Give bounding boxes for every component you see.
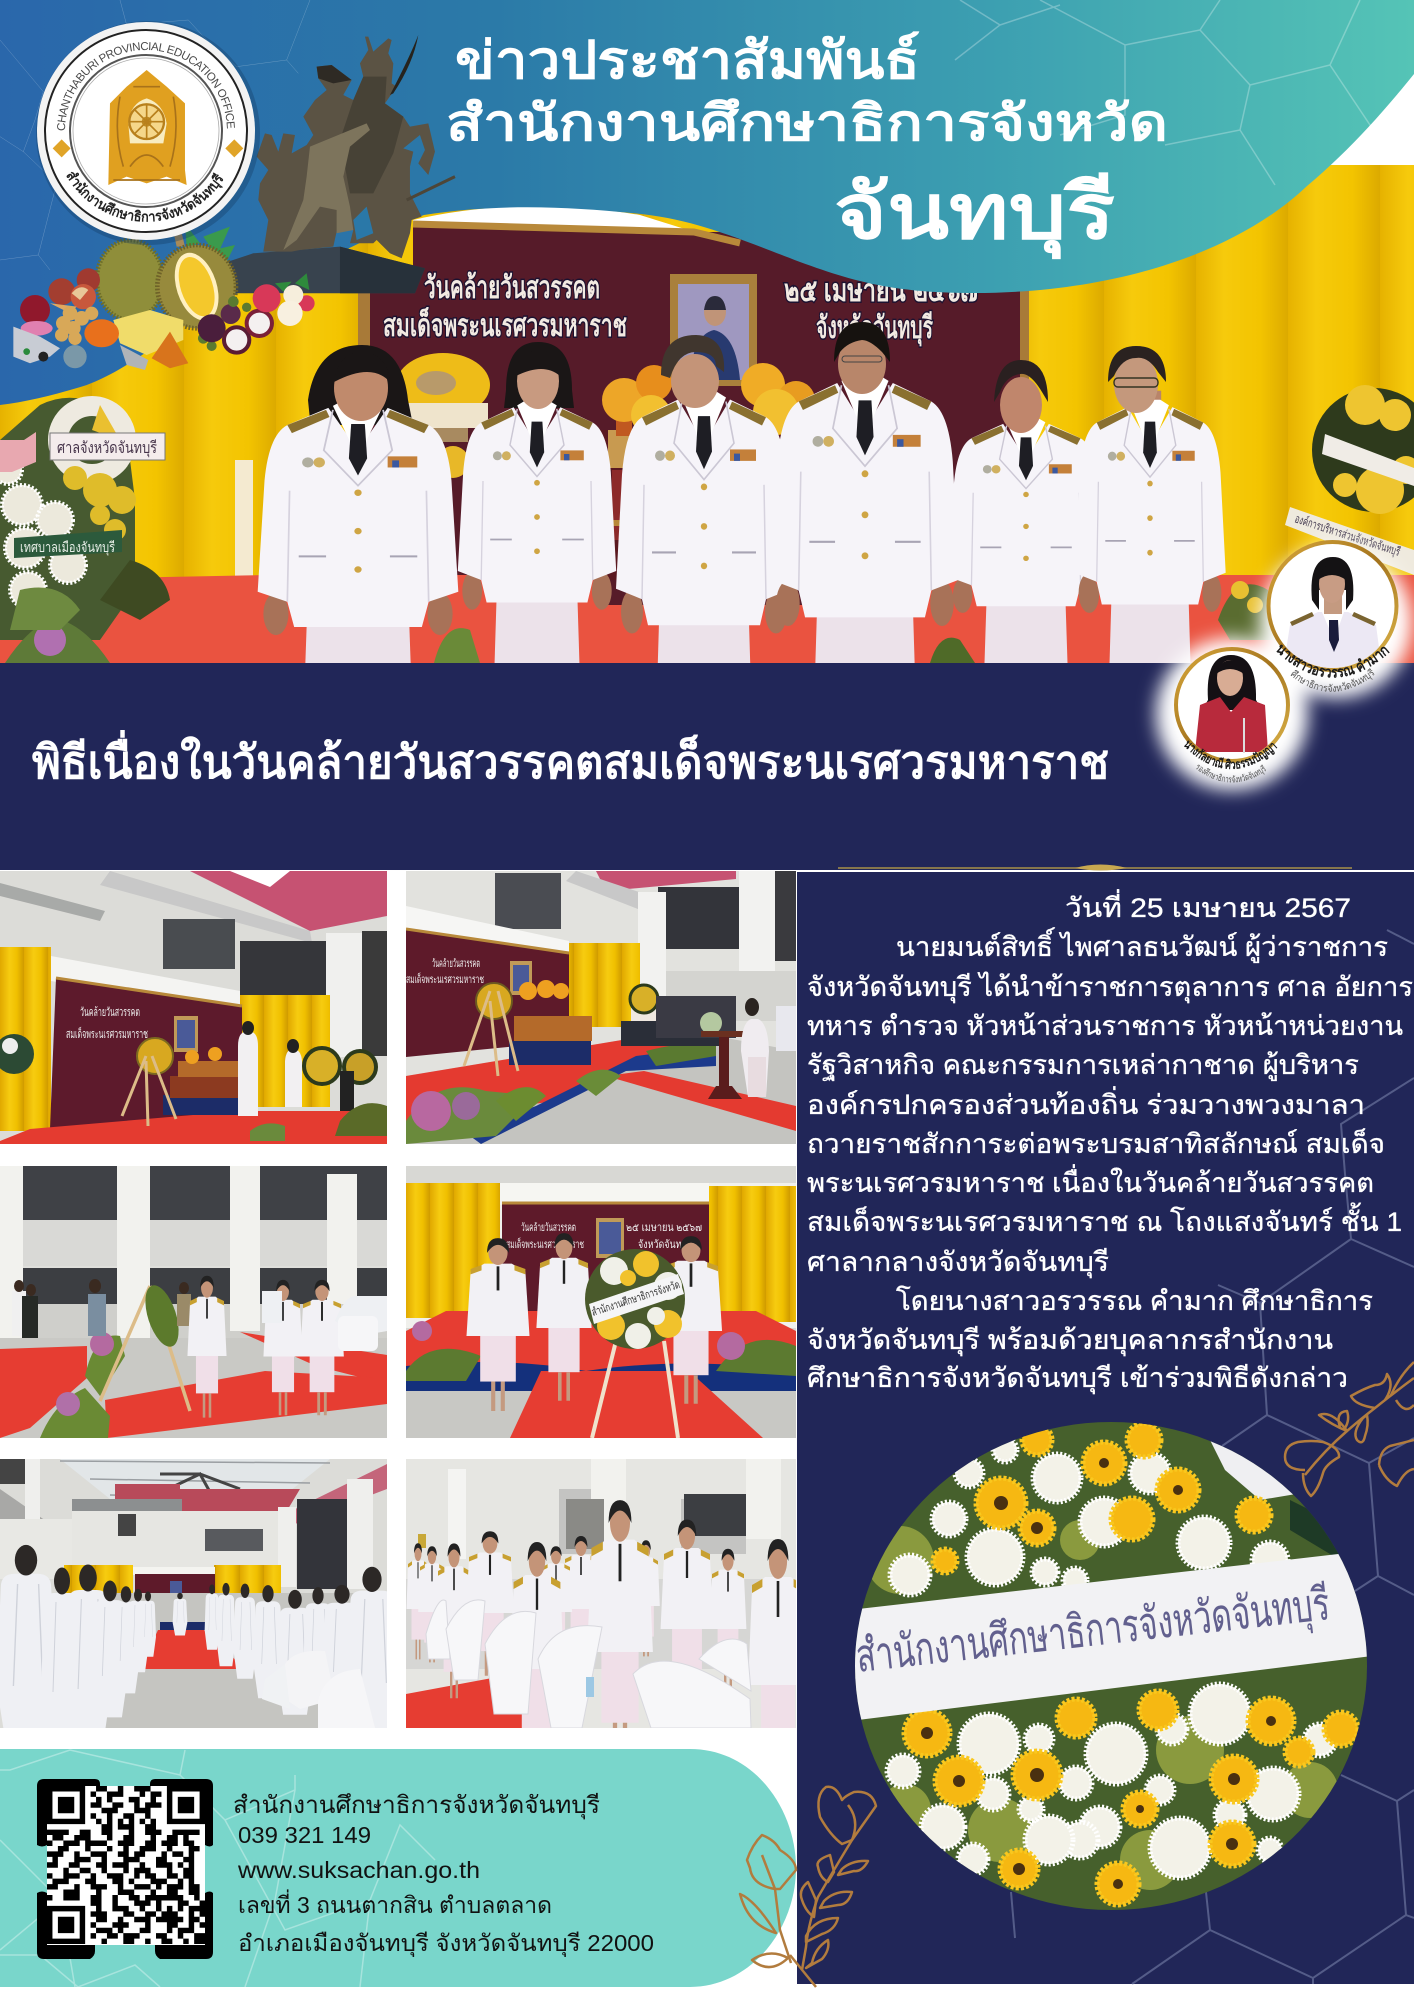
- article body text: ทหาร ตำรวจ หัวหน้าส่วนราชการ หัวหน้าหน่วยงาน: [807, 1011, 1403, 1041]
- contact details: [233, 1792, 654, 1957]
- photo: wreath stand in front of stage, wide view: วันคล้ายวันสวรรคต: [80, 1005, 140, 1019]
- portrait medallion: deputy provincial education officer: รองศึกษาธิการจังหวัดจันทบุรี: [1196, 764, 1266, 782]
- photo: three officers holding office wreath: วันคล้ายวันสวรรคต: [521, 1222, 576, 1234]
- photo: three officers holding office wreath: จังหวัดจันทบุรี: [638, 1238, 692, 1251]
- decorative hexagon lines in contact panel: [0, 1750, 435, 1987]
- provincial education office logo: สำนักงานศึกษาธิการจังหวัดจันทบุรี: [66, 172, 224, 222]
- title heading: public relations news: [446, 31, 1168, 260]
- contact details: อำเภอเมืองจันทบุรี จังหวัดจันทบุรี 22000: [238, 1930, 654, 1957]
- office wreath photo in circle: [850, 1415, 1375, 1915]
- fruit and gemstone cluster: [13, 215, 315, 370]
- title heading: public relations news: สำนักงานศึกษาธิการจังหวัด: [446, 95, 1168, 151]
- photo: three officers holding office wreath: ๒๕ เมษายน ๒๕๖๗: [626, 1222, 702, 1234]
- statue monument on pedestal: [223, 35, 455, 293]
- maroon backdrop with gold frame: [358, 206, 1029, 620]
- article body text: โดยนางสาวอรวรรณ คำมาก ศึกษาธิการ: [896, 1286, 1373, 1316]
- portrait medallion: provincial education officer: [1266, 540, 1398, 692]
- article body text: วันที่ 25 เมษายน 2567: [1065, 889, 1351, 923]
- QR code: [37, 1779, 213, 1959]
- officer 6: [1074, 346, 1226, 691]
- officer 4: [771, 322, 959, 720]
- logo emblem: [53, 70, 243, 185]
- portrait medallion: provincial education officer: นางสาวอรวรรณ คำมาก: [1276, 644, 1390, 678]
- contact details: 039 321 149: [238, 1822, 371, 1848]
- officer 3: [616, 335, 792, 724]
- teal contact panel: [0, 1749, 796, 1987]
- portrait medallion: deputy provincial education officer: [1174, 647, 1290, 782]
- left floral wreaths with signs: ศาลจังหวัดจันทบุรี: [57, 439, 157, 458]
- portrait medallion: provincial education officer: ศึกษาธิการจังหวัดจันทบุรี: [1290, 668, 1374, 692]
- backdrop heading text: ๒๕ เมษายน ๒๕๖๗: [784, 273, 978, 308]
- decorative hexagon lines in header: [0, 0, 1380, 270]
- backdrop heading text: สมเด็จพระนเรศวรมหาราช: [383, 306, 627, 343]
- header wave with blue to teal gradient: [0, 0, 1414, 405]
- backdrop heading text: [383, 270, 978, 347]
- photo: three officers holding office wreath: [406, 1166, 796, 1438]
- photo: governor reading at the lectern: วันคล้ายวันสวรรคต: [432, 958, 480, 970]
- provincial education office logo: [36, 21, 260, 245]
- article body text: ศึกษาธิการจังหวัดจันทบุรี เข้าร่วมพิธีดังกล่าว: [807, 1363, 1348, 1395]
- officer 5: [949, 360, 1103, 686]
- photo: governor reading at the lectern: [406, 871, 796, 1144]
- title heading: public relations news: ข่าวประชาสัมพันธ์: [455, 31, 920, 90]
- yellow pleated curtains: [0, 165, 1414, 663]
- article body text: จังหวัดจันทบุรี พร้อมด้วยบุคลากรสำนักงาน: [807, 1325, 1333, 1357]
- left floral wreaths with signs: เทศบาลเมืองจันทบุรี: [20, 539, 115, 556]
- banner glow behind portraits: [1156, 546, 1412, 790]
- officer 1: [258, 345, 458, 723]
- article body text: [807, 889, 1413, 1395]
- white corner at top right: [1280, 0, 1414, 165]
- gold leaf branch, lower left: [740, 1787, 876, 1987]
- photo: audience standing in white uniforms: [406, 1459, 796, 1728]
- left floral wreaths with signs: [0, 398, 170, 663]
- title heading: public relations news: จันทบุรี: [834, 170, 1115, 260]
- article body text: ศาลากลางจังหวัดจันทบุรี: [807, 1247, 1109, 1279]
- backdrop heading text: จังหวัดจันทบุรี: [816, 310, 933, 347]
- navy article panel: [797, 872, 1414, 1984]
- contact details: www.suksachan.go.th: [237, 1857, 480, 1883]
- article body text: รัฐวิสาหกิจ คณะกรรมการเหล่ากาชาด ผู้บริหาร: [807, 1050, 1359, 1081]
- right floral wreaths with signs: [434, 385, 1414, 663]
- officer 2: [458, 342, 616, 688]
- article body text: องค์กรปกครองส่วนท้องถิ่น ร่วมวางพวงมาลา: [807, 1086, 1365, 1120]
- photo: officer laying wreath: [0, 1166, 387, 1438]
- yellow wreath behind officers: [396, 353, 490, 478]
- article body text: ถวายราชสักการะต่อพระบรมสาทิสลักษณ์ สมเด็จ: [807, 1126, 1385, 1159]
- royal portrait: [670, 274, 757, 386]
- gold ornamental divider: [838, 864, 1352, 870]
- decorative hexagon lines in panel: [1011, 930, 1414, 1984]
- banner heading: พิธีเนื่องในวันคล้ายวันสวรรคตสมเด็จพระนเรศวรมหาราช: [32, 730, 1109, 788]
- photo: three officers holding office wreath: สำนักงานศึกษาธิการจังหวัด: [590, 1279, 681, 1319]
- article body text: นายมนต์สิทธิ์ ไพศาลธนวัฒน์ ผู้ว่าราชการ: [896, 927, 1388, 963]
- backdrop heading text: วันคล้ายวันสวรรคต: [424, 270, 600, 305]
- photo: wreath stand in front of stage, wide view: สมเด็จพระนเรศวรมหาราช: [66, 1026, 148, 1041]
- navy title banner: [0, 663, 1414, 870]
- gold leaf branch, upper right: [1285, 1362, 1414, 1496]
- altar table and flowers: [600, 363, 830, 580]
- portrait medallion: deputy provincial education officer: นางกัลยาณี ศิวธรรมปัญญา: [1184, 740, 1278, 770]
- hero photo: group portrait at the ceremony stage: [0, 165, 1414, 724]
- photo: wreath stand in front of stage, wide view: [0, 871, 387, 1144]
- photo: governor reading at the lectern: สมเด็จพระนเรศวรมหาราช: [406, 972, 484, 986]
- photo: three officers holding office wreath: สมเด็จพระนเรศวรมหาราช: [506, 1237, 584, 1251]
- contact details: เลขที่ 3 ถนนตากสิน ตำบลตลาด: [238, 1889, 552, 1918]
- article body text: จังหวัดจันทบุรี ได้นำข้าราชการตุลาการ ศาล อัยการ: [807, 972, 1413, 1004]
- provincial education office logo: CHANTHABURI PROVINCIAL EDUCATION OFFICE: [57, 42, 235, 130]
- article body text: พระนเรศวรมหาราช เนื่องในวันคล้ายวันสวรรคต: [807, 1164, 1374, 1198]
- red carpeted floor: [0, 575, 1414, 663]
- photo: ceremony hall view from behind the audience: [0, 1459, 387, 1728]
- article body text: สมเด็จพระนเรศวรมหาราช ณ โถงแสงจันทร์ ชั้น 1: [807, 1202, 1402, 1237]
- contact details: สำนักงานศึกษาธิการจังหวัดจันทบุรี: [233, 1792, 600, 1820]
